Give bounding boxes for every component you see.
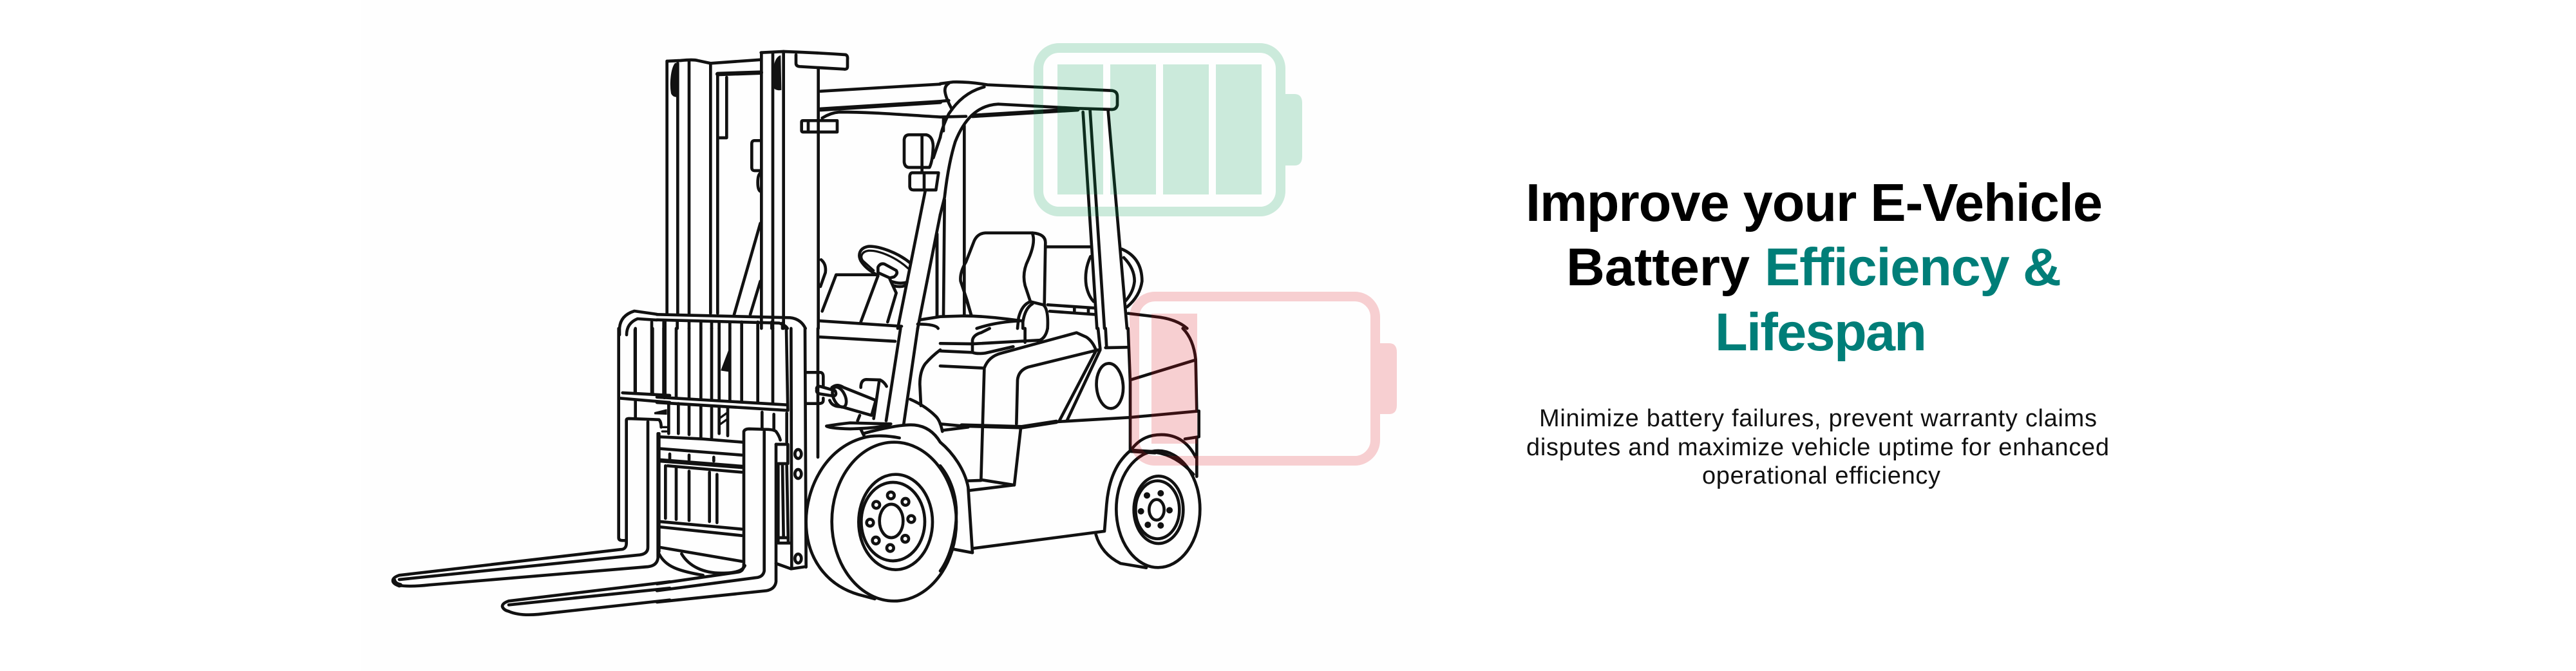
title: Battery [1566,237,1750,297]
description text: Minimize battery failures, prevent warranty claims [1539,405,2097,432]
mast, roof and steering [657,52,940,328]
icon: low red battery [1135,296,1397,461]
canopy, seat and rear post [937,82,1187,328]
icon: full green battery [1038,48,1302,211]
description text: operational efficiency [1702,462,1940,489]
carriage, right fork and drive wheel [657,328,956,602]
description text [1526,405,2109,489]
description text: disputes and maximize vehicle uptime for enhanced [1526,434,2109,461]
title [1526,173,2103,362]
body, counterweight and rear wheel [940,328,1200,571]
left fork [393,328,670,615]
title: Improve your E-Vehicle [1526,173,2103,232]
title: Lifespan [1715,302,1927,362]
forklift line illustration [393,52,1200,615]
carriage top-left corner [620,311,657,393]
title: Efficiency & [1765,237,2061,297]
